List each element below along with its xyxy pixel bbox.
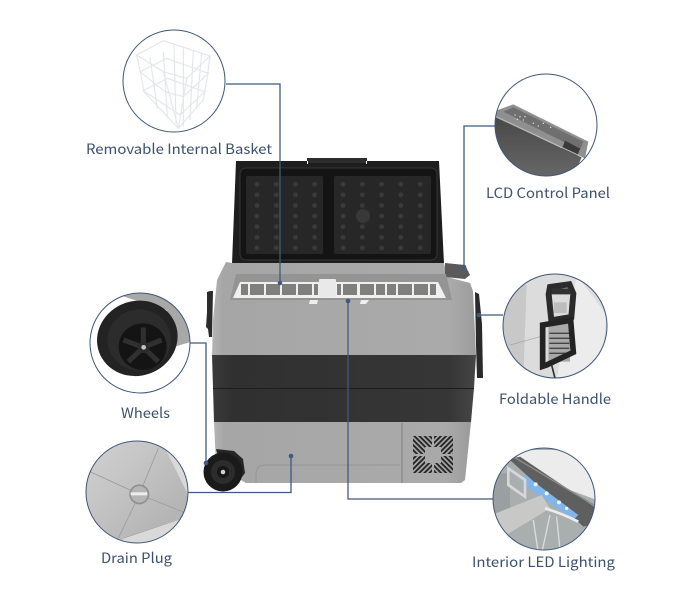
icon: wheel close-up: [97, 294, 190, 376]
panel: foldable handle: [499, 274, 611, 409]
panel: wheels: [86, 289, 192, 423]
cooler product: [204, 158, 483, 492]
infographic: [86, 30, 615, 570]
circle outline: [123, 30, 225, 132]
circle outline: [493, 448, 595, 550]
callout line: LED lighting: [348, 301, 493, 499]
icon: drain plug close-up: [86, 441, 190, 548]
circle outline: [503, 274, 607, 378]
control box: [445, 263, 470, 279]
panel: interior LED lighting: [472, 448, 615, 572]
wheel: [204, 449, 245, 492]
circle outline: [495, 74, 597, 176]
panel: removable internal basket: [86, 30, 273, 159]
icon: control panel close-up: [496, 104, 588, 176]
internal basket: [230, 274, 452, 304]
circle outline: [90, 293, 190, 393]
icon: wire basket: [136, 40, 211, 129]
panel: LCD control panel: [486, 74, 610, 203]
cooler lower body: [214, 422, 471, 483]
cooler upper body: [212, 262, 476, 355]
callout line: handle: [479, 314, 503, 316]
left side handle: [206, 291, 213, 337]
label: Foldable Handle: [499, 389, 611, 409]
panel: drain plug: [86, 441, 190, 568]
callout line: wheels: [190, 343, 206, 463]
callout dots: [204, 265, 481, 465]
callout line: LCD control panel: [464, 126, 495, 267]
label: Drain Plug: [101, 548, 172, 568]
open lid: [232, 158, 444, 264]
ventilation grille: [413, 436, 453, 473]
callout line: drain plug: [188, 456, 291, 492]
icon: LED strip close-up: [490, 448, 597, 553]
callout line: basket: [226, 84, 280, 283]
label: Removable Internal Basket: [86, 139, 273, 159]
label: Wheels: [121, 403, 170, 423]
icon: handle close-up: [502, 274, 607, 378]
dark centre band: [212, 355, 476, 422]
circle outline: [86, 441, 188, 543]
label: Interior LED Lighting: [472, 552, 615, 572]
label: LCD Control Panel: [486, 183, 610, 203]
right side handle: [475, 292, 483, 378]
